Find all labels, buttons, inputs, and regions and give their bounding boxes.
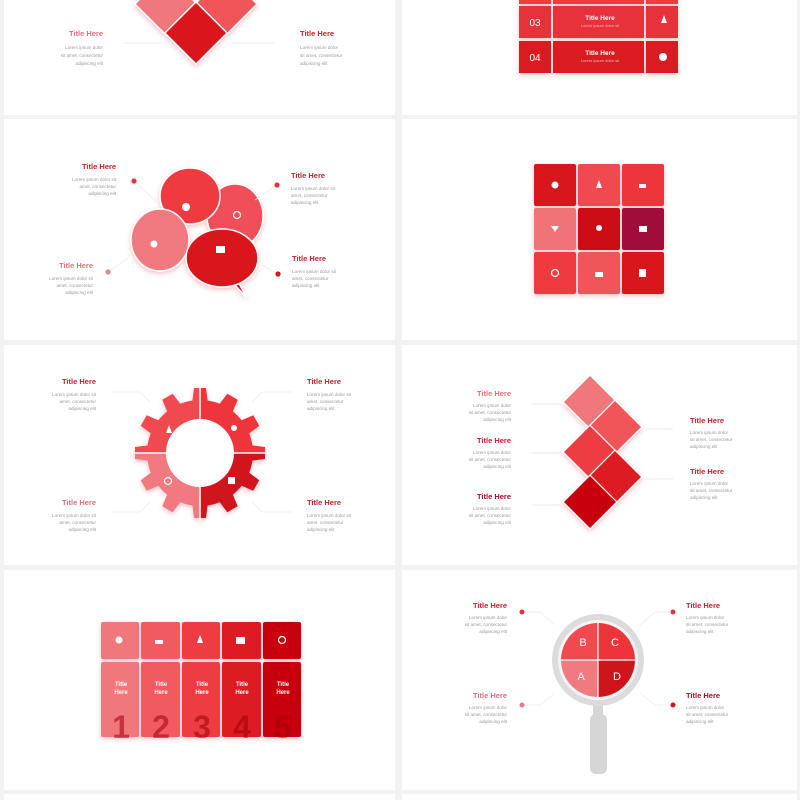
label TL [465,601,508,634]
label top-left [72,162,117,196]
panel: diagonal puzzle chain [469,375,733,529]
label R1: sit amet, consectetur [690,437,733,442]
label TR [307,377,352,411]
label L3: Lorem ipsum dolor [473,506,511,511]
label BR: Title Here [307,498,341,507]
icons [164,425,237,484]
label L2: adipiscing elit [483,464,512,469]
row 04 [529,50,667,64]
label TR: adipiscing elit [686,629,714,634]
column titles: Here [114,690,128,696]
label BL [465,691,508,724]
label TL: Lorem ipsum dolor [469,615,507,620]
label TL: adipiscing elit [68,406,97,411]
dots [105,178,281,277]
column titles: Here [235,690,249,696]
label BR: amet, consectetur [307,520,344,525]
column titles: Title [277,682,290,688]
column titles: Here [276,690,290,696]
panel: slide 1 puzzle diamond [61,0,343,66]
label TR: Lorem ipsum dolor [686,615,725,620]
label R2 [690,467,733,500]
label TR: Lorem ipsum dolor sit [307,392,352,397]
label top-left: Lorem ipsum dolor sit [72,177,117,182]
label BL: sit amet, consectetur [465,712,507,717]
column titles: Here [154,690,168,696]
text: right: sit amet, consectetur [300,53,343,58]
label TR: Title Here [307,377,341,386]
label bottom-left: Title Here [59,261,93,270]
lens: B [579,637,587,649]
text: left: Title Here [69,29,103,38]
label R2: Lorem ipsum dolor [690,481,729,486]
label BR: Lorem ipsum dolor [686,705,725,710]
row 04: Lorem ipsum dolor sit [581,58,620,63]
big numbers [112,709,292,745]
label TL: adipiscing elit [479,629,508,634]
label bottom-left: adipiscing elit [65,290,94,295]
label TR: sit amet, consectetur [686,622,729,627]
label R2: Title Here [690,467,724,476]
label BR: Lorem ipsum dolor sit [307,513,352,518]
label top-right: Title Here [291,171,325,180]
lens: A [577,671,585,683]
label R1: Lorem ipsum dolor [690,430,729,435]
panel: slide 2 numbered rows [519,0,678,73]
big numbers: 2 [152,709,170,745]
label BR [307,498,352,532]
label L2 [469,436,512,469]
row 03: Title Here [585,15,615,22]
lens: C [611,637,619,649]
handle [590,703,607,774]
row 03 [529,15,667,29]
column titles: Title [196,682,209,688]
label L1: Title Here [477,389,511,398]
label top-left: amet, consectetur [79,184,116,189]
label R1: adipiscing elit [690,444,718,449]
text: left: Lorem ipsum dolor [65,45,103,50]
label L1 [469,389,512,422]
label bottom-right: adipiscing elit [292,283,320,288]
text: right [300,29,343,66]
panel: magnifier puzzle [465,601,729,774]
label BL: adipiscing elit [479,719,508,724]
label L3: sit amet, consectetur [469,513,511,518]
label L3: adipiscing elit [483,520,512,525]
lens: D [613,671,621,683]
text: left: sit amet, consectetur [61,53,103,58]
label BL: Title Here [473,691,507,700]
row 04: Title Here [585,50,615,57]
label BL: Lorem ipsum dolor [469,705,507,710]
column titles: Title [236,682,249,688]
big numbers: 5 [274,709,292,745]
label BR: adipiscing elit [686,719,714,724]
column titles: Title [115,682,128,688]
label BR: Title Here [686,691,720,700]
label TL: Title Here [62,377,96,386]
label TR: Title Here [686,601,720,610]
label R1: Title Here [690,416,724,425]
text: right: adipiscing elit [300,61,328,66]
label BR: sit amet, consectetur [686,712,729,717]
label TL [52,377,97,411]
panel: brain puzzle [49,162,337,297]
row 04: 04 [529,53,541,64]
icons [150,203,240,253]
label TL: Title Here [473,601,507,610]
text: right: Title Here [300,29,334,38]
label TR [686,601,729,634]
big numbers: 1 [112,709,130,745]
label BR [686,691,729,724]
label bottom-left: Lorem ipsum dolor sit [49,276,94,281]
label BL: amet, consectetur [59,520,96,525]
label L2: Lorem ipsum dolor [473,450,511,455]
text: right: Lorem ipsum dolor [300,45,339,50]
label BL: Title Here [62,498,96,507]
label bottom-right: Lorem ipsum dolor sit [292,269,337,274]
label R1 [690,416,733,449]
lens [552,614,644,706]
column titles: Here [195,690,209,696]
connectors [108,181,278,274]
label TL: Lorem ipsum dolor sit [52,392,97,397]
label R2: sit amet, consectetur [690,488,733,493]
label bottom-right: Title Here [292,254,326,263]
label bottom-left [49,261,94,295]
label TL: amet, consectetur [59,399,96,404]
column titles: Title [155,682,168,688]
label top-left: Title Here [82,162,116,171]
label TR: amet, consectetur [307,399,344,404]
icons [116,635,286,644]
gear [132,385,268,521]
label BL: Lorem ipsum dolor sit [52,513,97,518]
label top-right: adipiscing elit [291,200,319,205]
label BR: adipiscing elit [307,527,335,532]
label L1: sit amet, consectetur [469,410,511,415]
label L1: Lorem ipsum dolor [473,403,511,408]
panel: 3x3 puzzle grid [534,164,664,294]
label top-left: adipiscing elit [88,191,117,196]
row 03: 03 [529,18,541,29]
label top-right: Lorem ipsum dolor sit [291,186,336,191]
label bottom-left: amet, consectetur [56,283,93,288]
row 03: Lorem ipsum dolor sit [581,23,620,28]
puzzle pieces [135,0,257,64]
text: left [61,29,104,66]
icons [551,180,647,277]
big numbers: 4 [233,709,251,745]
label L2: sit amet, consectetur [469,457,511,462]
label R2: adipiscing elit [690,495,718,500]
label L1: adipiscing elit [483,417,512,422]
label TR: adipiscing elit [307,406,335,411]
label top-right [291,171,336,205]
column titles [114,682,290,696]
label L3: Title Here [477,492,511,501]
label BL: adipiscing elit [68,527,97,532]
panel: numbered puzzle columns [101,622,301,745]
big numbers: 3 [193,709,211,745]
label top-right: amet, consectetur [291,193,328,198]
panel: gear puzzle [52,377,352,532]
label bottom-right: amet, consectetur [292,276,329,281]
text: left: adipiscing elit [75,61,104,66]
label L3 [469,492,512,525]
label TL: sit amet, consectetur [465,622,507,627]
label bottom-right [292,254,337,288]
brain shape [131,168,263,297]
label L2: Title Here [477,436,511,445]
label BL [52,498,97,532]
